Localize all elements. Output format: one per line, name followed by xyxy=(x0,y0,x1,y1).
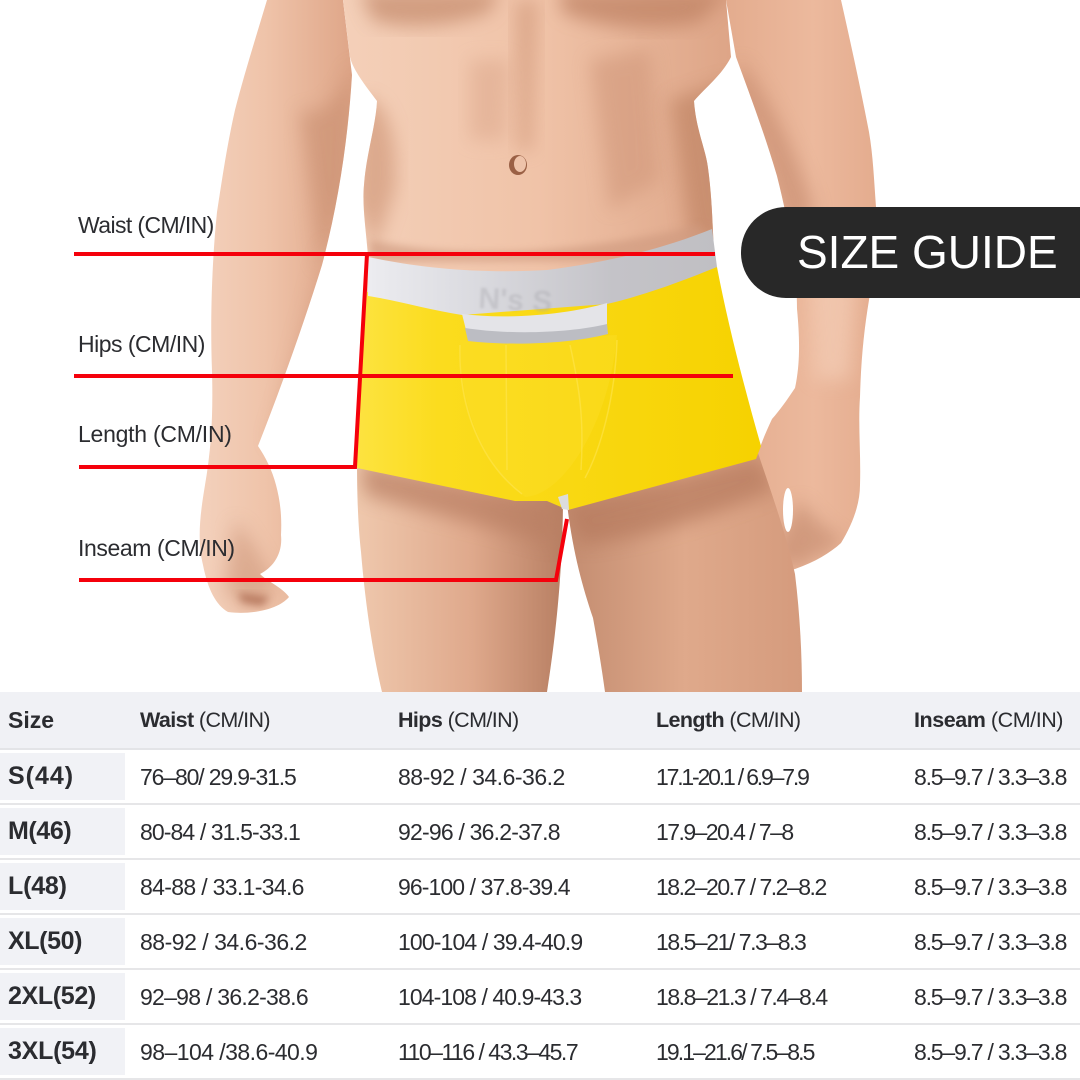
row: M(46): 8.5–9.7 / 3.3–3.8 xyxy=(914,819,1066,845)
yellow trunks xyxy=(357,267,761,510)
label: waist: Waist (CM/IN) xyxy=(78,212,214,238)
left leg xyxy=(357,468,563,692)
row: 3XL(54) xyxy=(0,1025,1080,1080)
row: S(44): 8.5–9.7 / 3.3–3.8 xyxy=(914,764,1066,790)
row: 2XL(52): 2XL(52) xyxy=(8,982,96,1010)
row: M(46): M(46) xyxy=(8,817,71,845)
row: M(46): 17.9–20.4 / 7–8 xyxy=(656,819,793,845)
pouch panel xyxy=(460,335,617,497)
table header: Hips (CM/IN) xyxy=(398,708,519,732)
row: L(48): 84-88 / 33.1-34.6 xyxy=(140,874,304,900)
row: L(48): 8.5–9.7 / 3.3–3.8 xyxy=(914,874,1066,900)
row: 3XL(54): 8.5–9.7 / 3.3–3.8 xyxy=(914,1039,1066,1065)
row: XL(50): XL(50) xyxy=(8,927,82,955)
row: M(46) xyxy=(0,805,1080,860)
torso xyxy=(340,0,735,302)
row: 3XL(54): 19.1–21.6/ 7.5–8.5 xyxy=(656,1039,813,1065)
row: XL(50) xyxy=(0,915,1080,970)
crotch gap xyxy=(558,494,569,510)
table header xyxy=(0,692,1080,750)
row: 2XL(52): 18.8–21.3 / 7.4–8.4 xyxy=(656,984,827,1010)
size guide badge xyxy=(741,207,1080,298)
row: S(44): 88-92 / 34.6-36.2 xyxy=(398,764,565,790)
gap between fingers xyxy=(783,488,793,532)
row: S(44): 76–80/ 29.9-31.5 xyxy=(140,764,296,790)
row: L(48): 96-100 / 37.8-39.4 xyxy=(398,874,570,900)
row: XL(50): 18.5–21/ 7.3–8.3 xyxy=(656,929,805,955)
pocket grey edge xyxy=(465,324,608,344)
row: 3XL(54): 110–116 / 43.3–45.7 xyxy=(398,1039,577,1065)
left arm xyxy=(200,0,352,613)
size guide badge: SIZE GUIDE xyxy=(797,226,1058,278)
measurement lines xyxy=(74,254,733,580)
row: S(44): S(44) xyxy=(8,762,74,790)
row: S(44): 17.1-20.1 / 6.9–7.9 xyxy=(656,764,808,790)
row: 3XL(54): 98–104 /38.6-40.9 xyxy=(140,1039,317,1065)
table header: Length (CM/IN) xyxy=(656,708,800,732)
waistband brand text: N's S xyxy=(478,282,553,319)
pouch seams xyxy=(460,340,617,494)
row: 2XL(52): 104-108 / 40.9-43.3 xyxy=(398,984,581,1010)
mesh pocket xyxy=(462,303,607,334)
row: L(48): 18.2–20.7 / 7.2–8.2 xyxy=(656,874,826,900)
row: 2XL(52): 92–98 / 36.2-38.6 xyxy=(140,984,308,1010)
row: L(48): L(48) xyxy=(8,872,67,900)
row: 2XL(52): 8.5–9.7 / 3.3–3.8 xyxy=(914,984,1066,1010)
row: M(46): 80-84 / 31.5-33.1 xyxy=(140,819,300,845)
row: L(48) xyxy=(0,860,1080,915)
right leg xyxy=(568,454,802,692)
row: S(44) xyxy=(0,750,1080,805)
row: XL(50): 100-104 / 39.4-40.9 xyxy=(398,929,582,955)
row: M(46): 92-96 / 36.2-37.8 xyxy=(398,819,560,845)
row: XL(50): 88-92 / 34.6-36.2 xyxy=(140,929,307,955)
table header: Waist (CM/IN) xyxy=(140,708,270,732)
row: 3XL(54): 3XL(54) xyxy=(8,1037,97,1065)
navel xyxy=(509,155,527,175)
table header: Inseam (CM/IN) xyxy=(914,708,1063,732)
grey waistband xyxy=(368,229,717,344)
row: 2XL(52) xyxy=(0,970,1080,1025)
row: XL(50): 8.5–9.7 / 3.3–3.8 xyxy=(914,929,1066,955)
label: hips: Hips (CM/IN) xyxy=(78,331,205,357)
model photo illustration with measurement lines xyxy=(74,0,876,692)
table header: Size xyxy=(8,707,54,733)
label: inseam: Inseam (CM/IN) xyxy=(78,535,235,561)
size table xyxy=(0,692,1080,1080)
label: length: Length (CM/IN) xyxy=(78,421,232,447)
right arm xyxy=(726,0,876,570)
